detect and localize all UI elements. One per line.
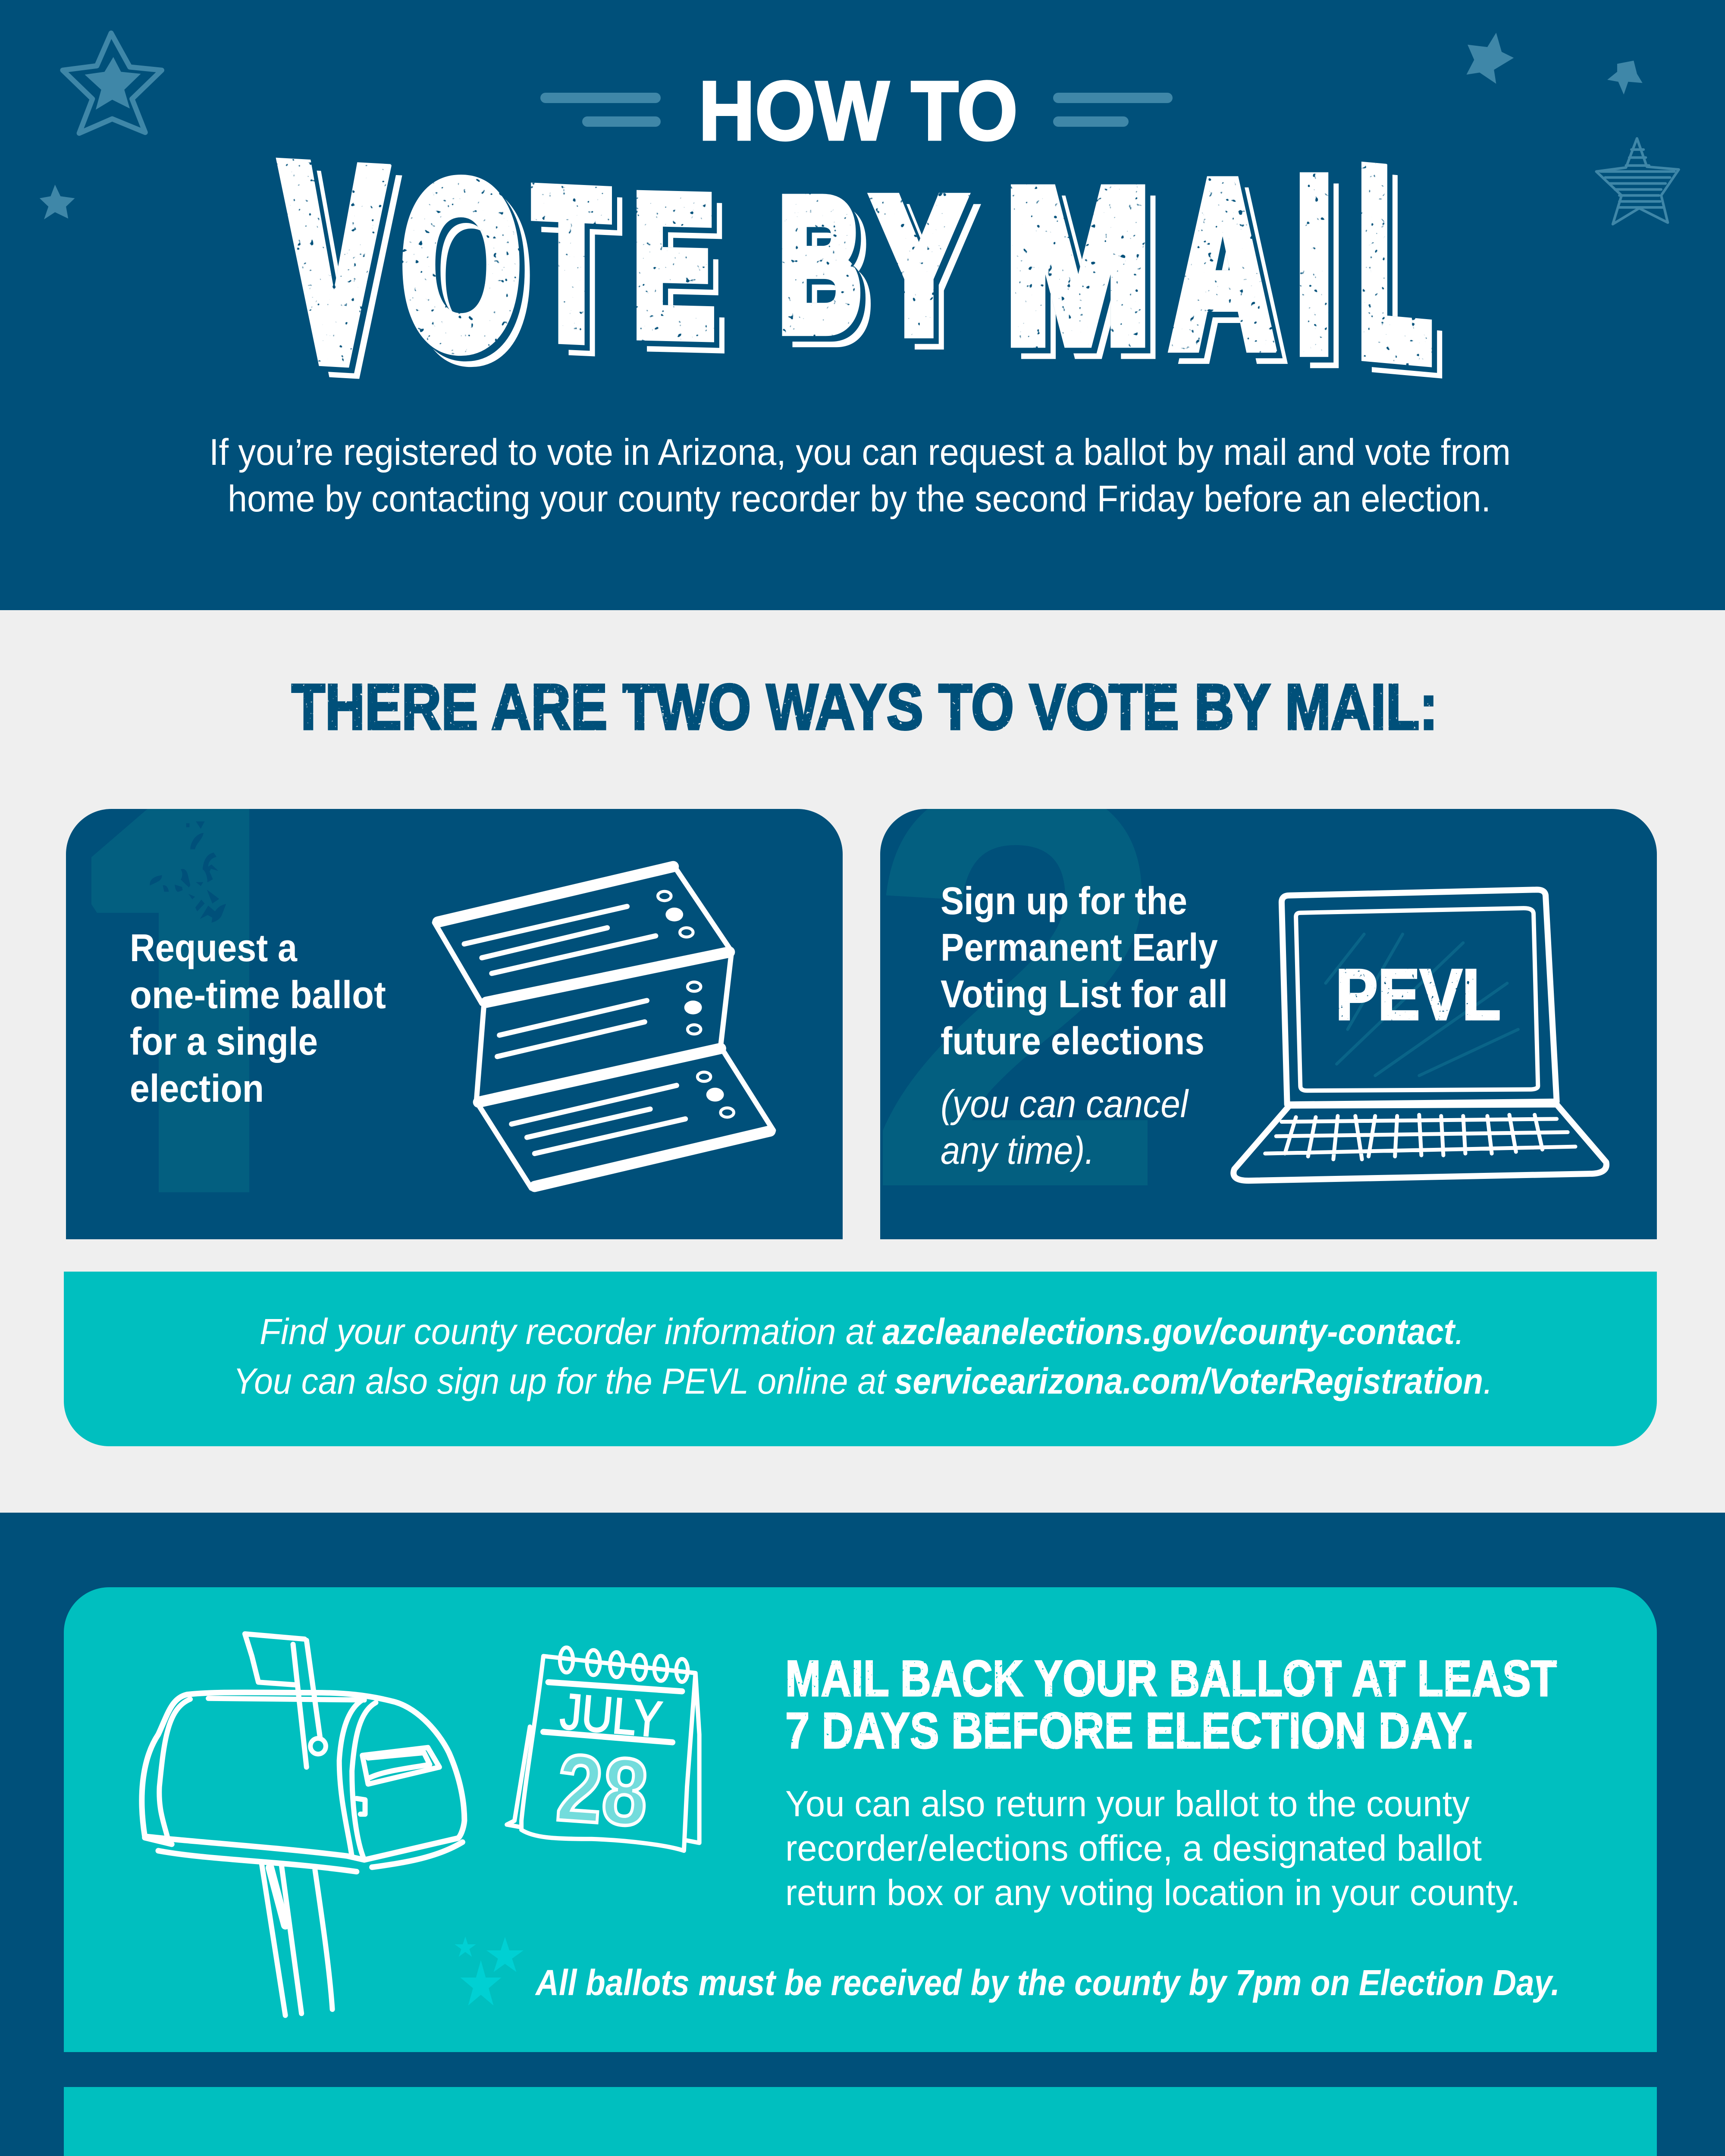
text: request a ballot bbox=[130, 927, 386, 1110]
text: request a ballot: election bbox=[130, 1067, 264, 1110]
callout background bbox=[64, 1272, 1657, 1446]
title: vote by mail: M bbox=[1005, 145, 1151, 386]
text: permanent early voting list bbox=[941, 880, 1228, 1172]
title: vote by mail: T bbox=[534, 144, 609, 384]
heading: mail back: MAIL BACK YOUR BALLOT AT LEAST bbox=[785, 1650, 1557, 1707]
text: pevl: PEVL bbox=[1336, 955, 1501, 1035]
intro text: home by contacting your county recorder by the second Friday before an election. bbox=[228, 478, 1491, 520]
big number 1: 1 bbox=[13, 650, 377, 1319]
title: how to with dashes bbox=[546, 64, 1167, 158]
title: vote by mail: L bbox=[1358, 113, 1431, 414]
text: 28: 28 bbox=[554, 1734, 651, 1846]
title: vote by mail: E bbox=[633, 154, 715, 378]
icon: mailbox bbox=[142, 1634, 464, 2015]
text: permanent early voting list: future elections bbox=[941, 1020, 1204, 1063]
panel: id verification bbox=[64, 2087, 1657, 2156]
text: find your county recorder: servicearizona.com/VoterRegistration bbox=[894, 1361, 1483, 1401]
text: find your county recorder bbox=[233, 1311, 1493, 1401]
text: permanent early voting list: (you can cancel bbox=[941, 1083, 1189, 1126]
icon: outlined star top left bbox=[63, 33, 162, 133]
text: find your county recorder: You can also sign up for the PEVL online at bbox=[233, 1361, 887, 1401]
panel: header background bbox=[0, 0, 1725, 610]
text: return options: You can also return your ballot to the county bbox=[785, 1783, 1470, 1824]
card background bbox=[64, 1587, 1657, 2052]
icon: laptop bbox=[1233, 890, 1606, 1181]
text: permanent early voting list: Permanent Early bbox=[941, 926, 1218, 969]
heading: mail back: 7 DAYS BEFORE ELECTION DAY. bbox=[785, 1702, 1474, 1759]
text: find your county recorder: Find your county recorder information at bbox=[260, 1311, 876, 1352]
text: find your county recorder: azcleanelections.gov/county-contact bbox=[882, 1311, 1456, 1352]
panel: mail back ballot bbox=[64, 1587, 1657, 2052]
heading: how to: HOW TO bbox=[699, 64, 1018, 158]
decorative stars in header bbox=[40, 33, 1679, 224]
title: vote by mail: O bbox=[401, 135, 521, 395]
text: permanent early voting list: Sign up for the bbox=[941, 880, 1187, 923]
card background bbox=[880, 809, 1657, 1239]
heading: mail back bbox=[785, 1650, 1557, 1759]
speckles on number 1 bbox=[150, 821, 226, 923]
title: vote by mail: V bbox=[282, 108, 386, 418]
panel: county recorder callout bbox=[64, 1272, 1657, 1446]
icon: star top right bbox=[1466, 33, 1514, 84]
text: find your county recorder: . bbox=[1483, 1361, 1493, 1401]
text: return options bbox=[785, 1783, 1520, 1913]
text: permanent early voting list: Voting List for all bbox=[941, 973, 1228, 1016]
text: find your county recorder: . bbox=[1455, 1311, 1465, 1352]
panel: option 2 bbox=[880, 809, 1657, 1239]
title: vote by mail: A bbox=[1171, 134, 1274, 394]
text: request a ballot: one-time ballot bbox=[130, 974, 386, 1017]
text: request a ballot: Request a bbox=[130, 927, 298, 970]
panel: two ways section background bbox=[0, 610, 1725, 1513]
title: vote by mail: I bbox=[1295, 128, 1333, 400]
text: july: JULY bbox=[558, 1683, 664, 1748]
decorative dashes bbox=[546, 98, 1167, 122]
text: deadline: All ballots must be received by the county by 7pm on Election Day. bbox=[535, 1962, 1560, 2003]
intro text bbox=[209, 432, 1511, 520]
icon: small star left bbox=[40, 185, 75, 219]
card background bbox=[66, 809, 843, 1239]
icon: folded ballot bbox=[435, 865, 773, 1188]
text: return options: return box or any voting location in your county. bbox=[785, 1872, 1520, 1913]
panel: lower section background bbox=[0, 1513, 1725, 2156]
title: vote by mail bbox=[282, 108, 1431, 418]
intro text: If you’re registered to vote in Arizona, you can request a ballot by mail and vote from bbox=[209, 432, 1511, 473]
big number 2: 2 bbox=[864, 663, 1170, 1308]
title: vote by mail: Y bbox=[873, 158, 964, 372]
text: return options: recorder/elections office, a designated ballot bbox=[785, 1828, 1482, 1868]
panel: option 1 bbox=[66, 809, 843, 1239]
title: vote by mail: B bbox=[778, 160, 862, 370]
icon: teal stars bbox=[455, 1937, 524, 2006]
icon: striped star right bbox=[1596, 138, 1679, 224]
icon: small star top right bbox=[1607, 61, 1643, 94]
card background bbox=[64, 2087, 1657, 2156]
text: request a ballot: for a single bbox=[130, 1020, 318, 1063]
text: permanent early voting list: any time). bbox=[941, 1129, 1095, 1172]
heading: two ways: THERE ARE TWO WAYS TO VOTE BY MAIL: bbox=[292, 671, 1438, 743]
icon: calendar bbox=[507, 1648, 699, 1851]
